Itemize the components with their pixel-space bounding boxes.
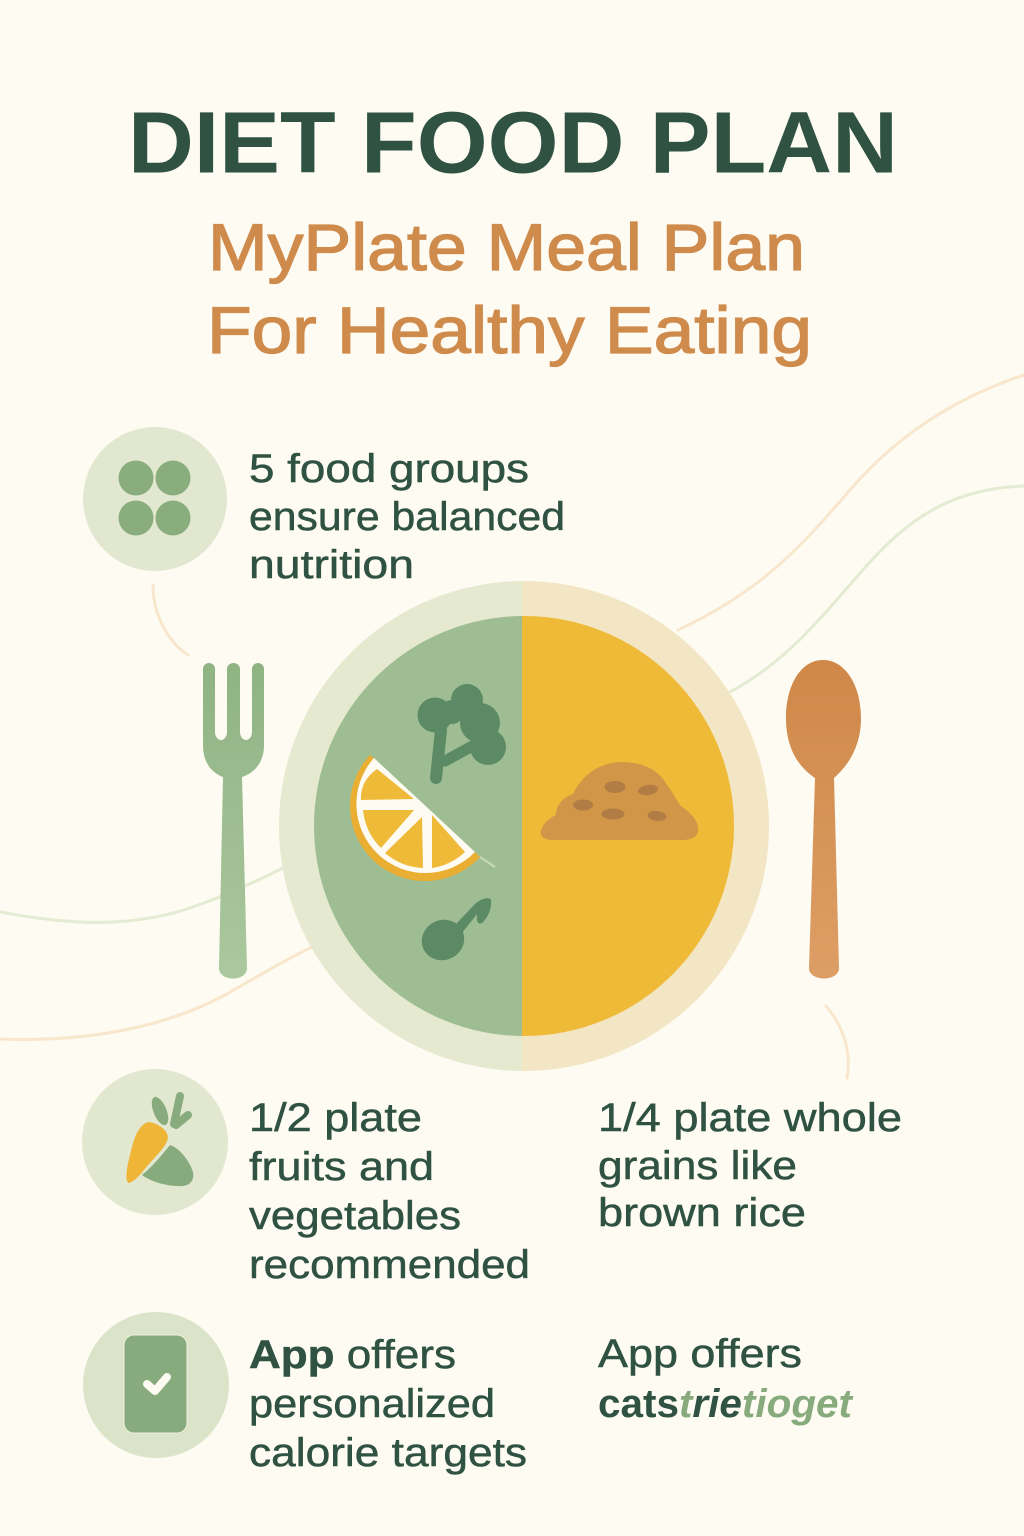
icon: carrot and vegetable: [82, 1069, 228, 1215]
text: app offers: [598, 1332, 854, 1426]
text: fruits and vegetables: vegetables: [249, 1194, 461, 1238]
text: whole grains: 1/4 plate whole: [598, 1096, 902, 1140]
icon: broccoli: [418, 684, 506, 778]
left half: fruits and vegetables: [314, 616, 522, 1036]
text: food groups: nutrition: [249, 543, 414, 587]
text: fruits and vegetables: 1/2 plate: [249, 1096, 422, 1140]
text: food groups: [249, 447, 565, 587]
text: whole grains: [598, 1096, 902, 1235]
plate: [279, 581, 769, 1071]
text: fruits and vegetables: [249, 1096, 530, 1287]
subtitle: For Healthy Eating: [207, 293, 812, 367]
icon: grain mound: [541, 762, 698, 840]
text: calorie targets: personalized: [249, 1382, 495, 1426]
subtitle: [207, 210, 812, 367]
text: fruits and vegetables: recommended: [249, 1243, 530, 1287]
icon: spoon: [786, 660, 861, 978]
icon: phone with check: [83, 1312, 229, 1458]
text: whole grains: brown rice: [598, 1191, 806, 1235]
text: calorie targets: App offers: [249, 1333, 456, 1377]
text: whole grains: grains like: [598, 1144, 797, 1188]
icon: fork: [203, 663, 264, 978]
text: calorie targets: calorie targets: [249, 1431, 527, 1475]
text: food groups: 5 food groups: [249, 447, 529, 491]
right half: grains: [522, 616, 734, 1036]
text: food groups: ensure balanced: [249, 495, 565, 539]
background curves: [0, 375, 1024, 1078]
text: app offers: App offers: [598, 1332, 802, 1376]
icon: orange slice: [350, 755, 495, 881]
text: app offers: catstrietioget: [598, 1382, 854, 1426]
text: calorie targets: [249, 1333, 527, 1475]
icon: small vegetable: [415, 898, 491, 967]
subtitle: MyPlate Meal Plan: [208, 210, 805, 284]
icon: four food groups: [83, 427, 227, 571]
title: DIET FOOD PLAN: [128, 94, 898, 192]
text: fruits and vegetables: fruits and: [249, 1145, 434, 1189]
